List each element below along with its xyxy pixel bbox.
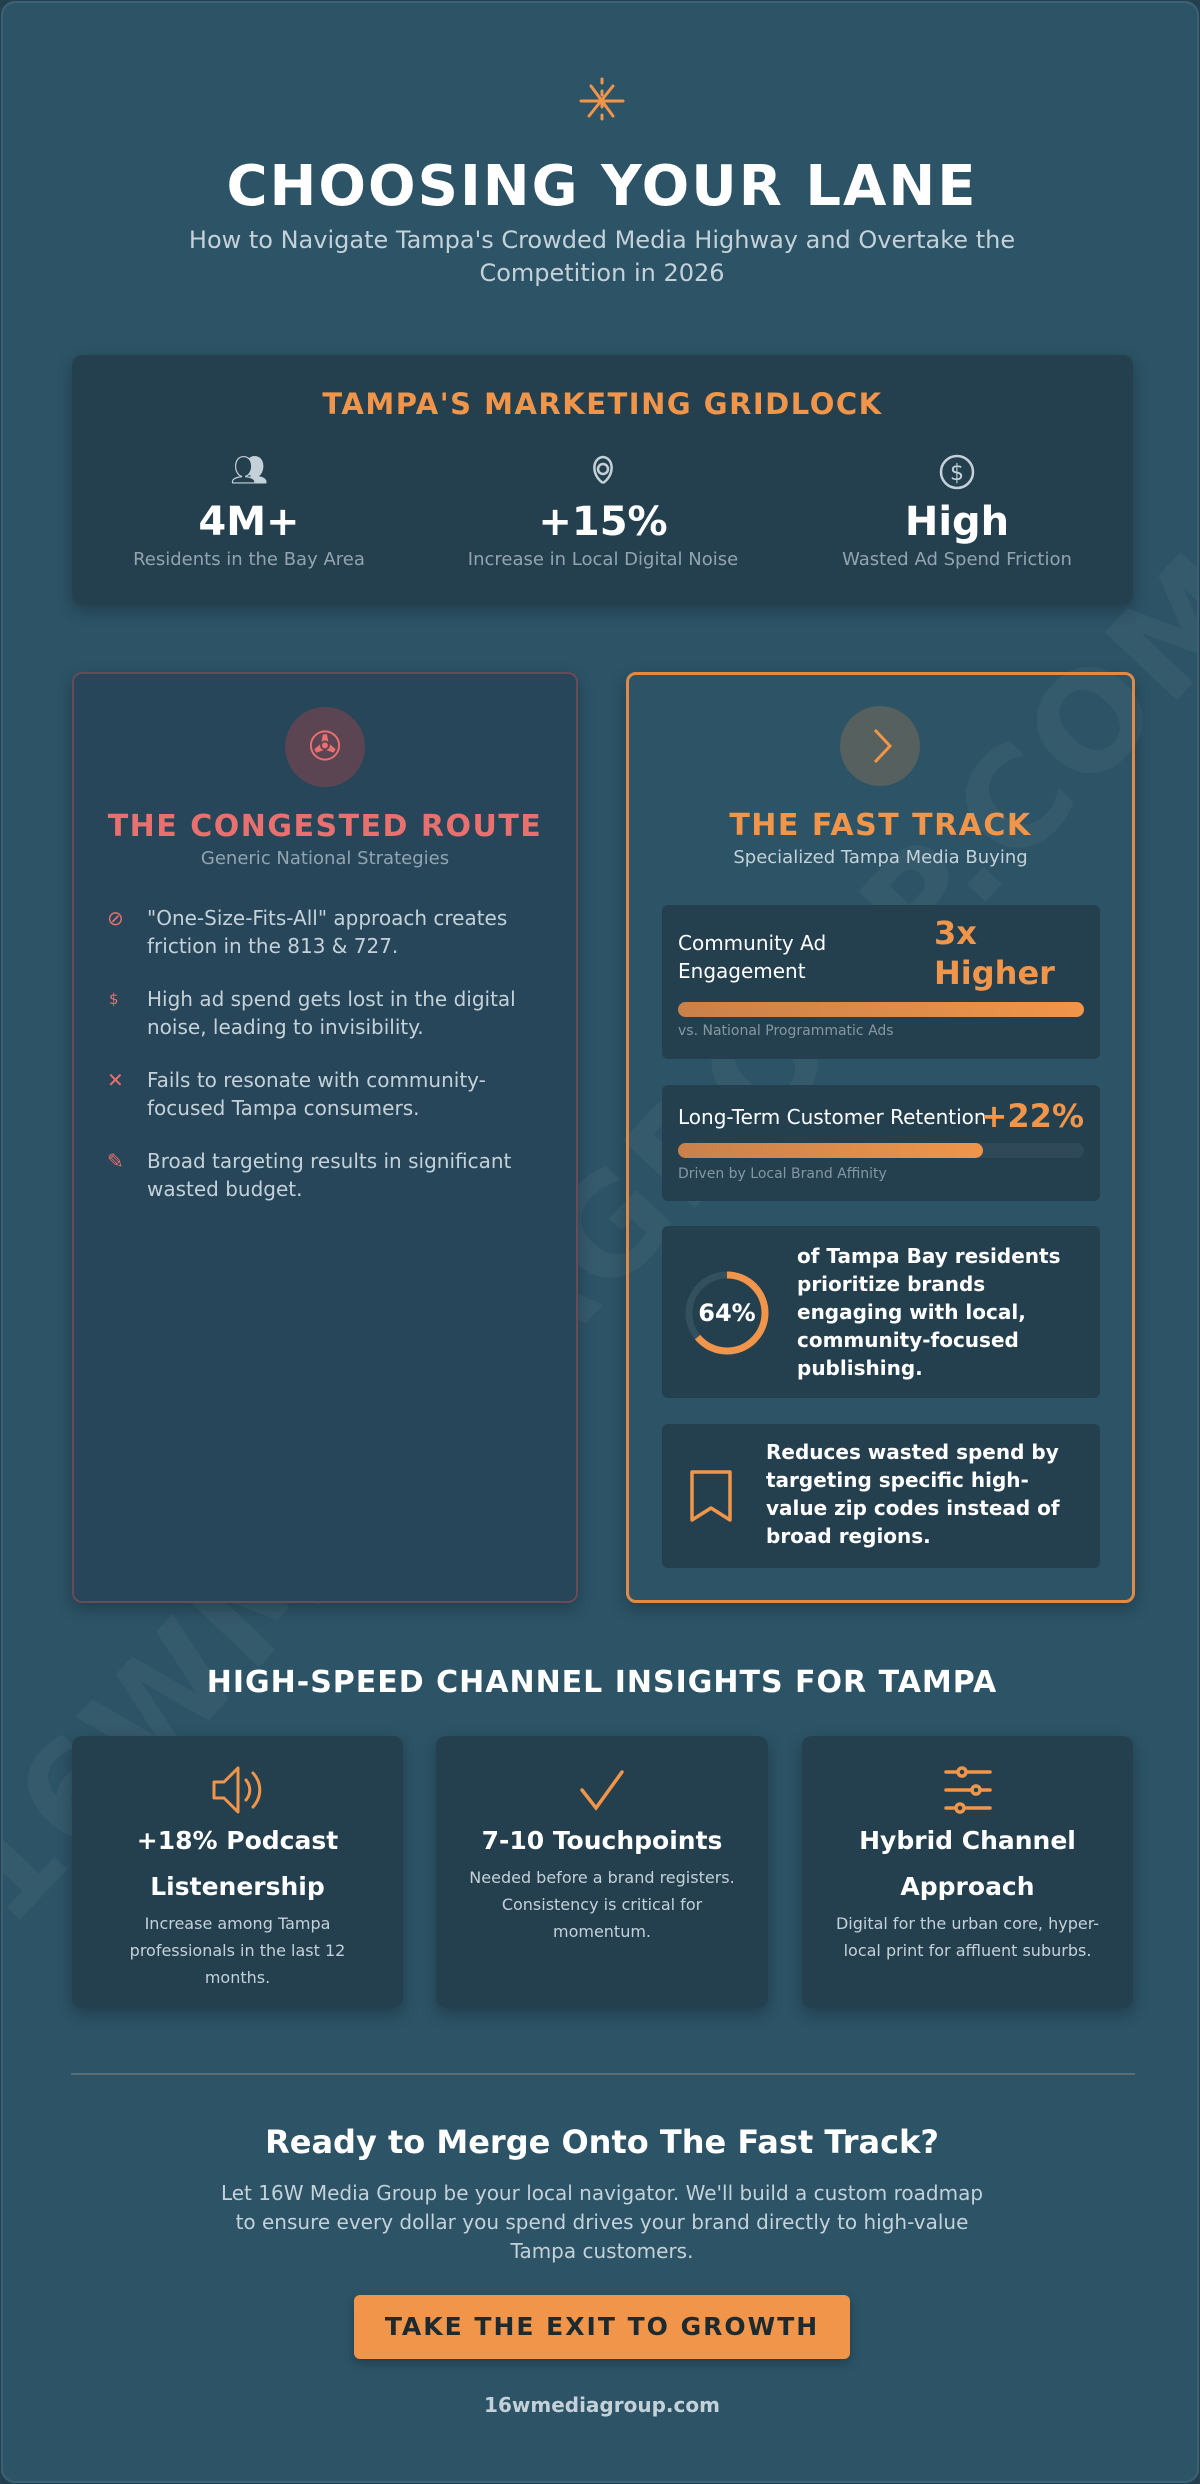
footer url: 16wmediagroup.com <box>484 2393 720 2417</box>
stat box: retention: Driven by Local Brand Affinity <box>678 1166 887 1182</box>
stat box: retention: Long-Term Customer Retention <box>678 1105 987 1129</box>
subheading: Generic National Strategies <box>201 848 449 869</box>
CTA heading: Ready to Merge Onto The Fast Track? <box>265 2123 939 2161</box>
card: podcast: Increase among Tampa professionals in the last 12 months. <box>130 1914 345 1987</box>
item 1: ⊘ <box>107 906 124 930</box>
stat box: 64% donut: of Tampa Bay residents prioritize brands engaging with local, community-focused publishing. <box>797 1244 1060 1380</box>
heading: fast track: THE FAST TRACK <box>729 808 1032 843</box>
panel: congested route <box>72 672 578 1603</box>
item 1: "One-Size-Fits-All" approach creates friction in the 813 & 727. <box>147 906 507 958</box>
card: touchpoints: Needed before a brand registers. Consistency is critical for momentum. <box>469 1868 735 1941</box>
stat box: retention: +22% <box>981 1097 1084 1135</box>
stat: digital noise: Increase in Local Digital Noise <box>468 549 738 570</box>
heading: congested route: THE CONGESTED ROUTE <box>108 809 542 844</box>
list: problems <box>107 906 516 1201</box>
stat: residents: Residents in the Bay Area <box>133 549 365 570</box>
card: hybrid: Approach <box>900 1872 1035 1901</box>
card: hybrid <box>802 1736 1133 2008</box>
item 3: ✕ <box>107 1068 124 1092</box>
stat: digital noise: +15% <box>538 499 668 545</box>
stat: wasted spend <box>842 454 1072 570</box>
bar: retention <box>678 1143 1084 1158</box>
icon: signal <box>593 456 613 484</box>
icon: chevron <box>840 706 920 786</box>
item 2: High ad spend gets lost in the digital noise, leading to invisibility. <box>147 987 516 1039</box>
donut chart: 64% <box>698 1299 756 1327</box>
donut chart <box>686 1272 768 1354</box>
stat box: community engagement: Community Ad Engagement <box>678 931 826 983</box>
card: podcast: +18% Podcast <box>137 1826 338 1855</box>
stat: wasted spend: Wasted Ad Spend Friction <box>842 549 1072 570</box>
icon: sliders <box>944 1766 992 1814</box>
item 4: ✎ <box>107 1149 124 1173</box>
heading: gridlock: TAMPA'S MARKETING GRIDLOCK <box>322 387 883 421</box>
stat: digital noise <box>468 456 738 570</box>
subtitle: How to Navigate Tampa's Crowded Media Highway and Overtake the Competition in 2026 <box>189 226 1015 287</box>
icon: dollar: $ <box>950 461 964 486</box>
card: podcast <box>72 1736 403 2008</box>
stat box: community engagement: vs. National Programmatic Ads <box>678 1023 894 1039</box>
CTA button <box>354 2295 850 2359</box>
item 4: Broad targeting results in significant wasted budget. <box>147 1149 511 1201</box>
card: touchpoints <box>436 1736 768 2008</box>
stat box: retention <box>662 1085 1100 1201</box>
stat box: community engagement <box>662 905 1100 1059</box>
title: CHOOSING YOUR LANE <box>226 154 978 219</box>
card: hybrid: Digital for the urban core, hyper-local print for affluent suburbs. <box>836 1914 1099 1960</box>
icon: speaker <box>212 1766 262 1814</box>
stat box: community engagement: Higher <box>934 954 1055 992</box>
icon: header road sign <box>580 78 624 120</box>
stat box: community engagement: 3x <box>934 914 977 952</box>
stat box: zip targeting <box>662 1424 1100 1568</box>
stat box: 64% donut <box>662 1226 1100 1398</box>
item 2: $ <box>109 990 119 1008</box>
bar: engagement <box>678 1002 1084 1017</box>
item 3: Fails to resonate with community-focused Tampa consumers. <box>147 1068 486 1120</box>
stat: wasted spend: High <box>905 499 1009 545</box>
icon: bookmark <box>690 1470 732 1522</box>
heading: channel insights: HIGH-SPEED CHANNEL INSIGHTS FOR TAMPA <box>207 1665 997 1700</box>
icon: tangled route: ✇ <box>308 724 342 770</box>
icon: dollar <box>940 454 974 490</box>
icon: check <box>580 1770 624 1811</box>
panel: marketing gridlock <box>72 355 1133 605</box>
icon: people: 👥︎ <box>230 453 268 488</box>
icon: tangled route <box>285 707 365 787</box>
subheading: Specialized Tampa Media Buying <box>733 847 1028 868</box>
stat box: zip targeting: Reduces wasted spend by targeting specific high-value zip codes instead of broad regions. <box>766 1440 1060 1548</box>
stat: residents <box>133 453 365 570</box>
panel: fast track <box>626 672 1135 1603</box>
card: hybrid: Hybrid Channel <box>859 1826 1076 1855</box>
card: touchpoints: 7-10 Touchpoints <box>482 1826 722 1855</box>
CTA paragraph: Let 16W Media Group be your local navigator. We'll build a custom roadmap to ensure every dollar you spend drives your brand directly to high-value Tampa customers. <box>221 2181 983 2263</box>
CTA button: TAKE THE EXIT TO GROWTH <box>385 2312 819 2341</box>
stat: residents: 4M+ <box>198 499 300 545</box>
card: podcast: Listenership <box>150 1872 325 1901</box>
